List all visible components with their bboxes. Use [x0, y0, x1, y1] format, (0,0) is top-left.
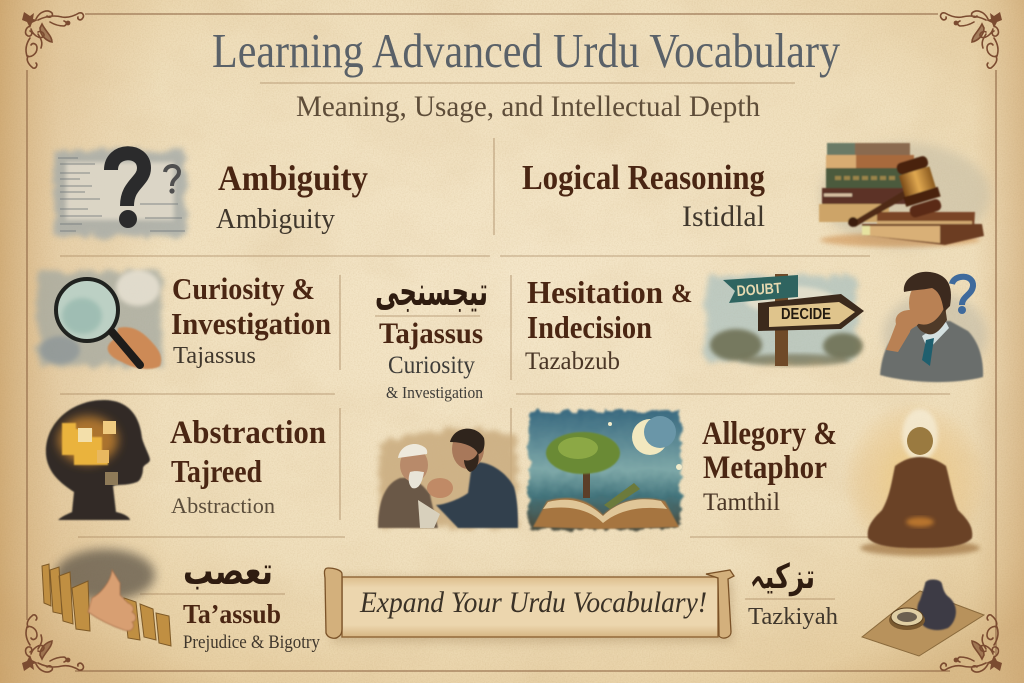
- meaning: Prejudice and Bigotry: Prejudice & Bigotry: [183, 632, 320, 653]
- urdu word: تعصب: [183, 549, 273, 593]
- meaning: and Investigation: & Investigation: [386, 383, 483, 402]
- heading: Curiosity &: Curiosity &: [172, 271, 315, 306]
- transliteration: Ambiguity: Ambiguity: [216, 203, 335, 235]
- corner ornament: top left: [22, 11, 83, 68]
- heading: Tajassus: Tajassus: [379, 317, 483, 350]
- icon: magnifying glass in hand: [38, 270, 162, 369]
- heading: Investigation: Investigation: [171, 306, 331, 341]
- icon: books and gavel: [819, 143, 990, 247]
- panel: abstraction: [46, 400, 326, 520]
- transliteration: Tazkiyah: Tazkiyah: [748, 604, 838, 630]
- panel: curiosity and investigation: [38, 270, 331, 369]
- panel: ambiguity: [54, 150, 368, 236]
- meaning: Curiosity: Curiosity: [388, 352, 475, 379]
- panel: allegory and metaphor: [702, 402, 987, 558]
- heading: Ta'assub: Ta’assub: [183, 599, 281, 629]
- panel: tajassus: [375, 269, 488, 402]
- icon: thinking man with question mark: [880, 272, 987, 382]
- heading: Ambiguity: Ambiguity: [218, 158, 368, 198]
- panel: ta'assub: [42, 549, 320, 653]
- illustration: elder and young man in discussion: [378, 429, 518, 528]
- icon: head silhouette with glowing fragments: [46, 400, 150, 520]
- icon: doubt and decide signpost: [706, 274, 864, 366]
- icon: doubt and decide signpost: DECIDE: [781, 306, 831, 323]
- title: Learning Advanced Urdu Vocabulary: [212, 23, 840, 78]
- subtitle: Meaning, Usage, and Intellectual Depth: [296, 90, 760, 123]
- icon: doubt and decide signpost: DOUBT: [736, 280, 782, 300]
- heading: Allegory &: Allegory &: [702, 416, 837, 452]
- panel: hesitation and indecision: [525, 272, 987, 382]
- urdu word: تیجسنجی: [375, 269, 488, 315]
- panel: logical reasoning: [522, 143, 990, 247]
- banner: expand your vocabulary: Expand Your Urdu Vocabulary!: [359, 586, 707, 619]
- corner ornament: bottom right: [941, 615, 1002, 672]
- icon: question marks over faded text: [54, 150, 186, 236]
- transliteration: Istidlal: Istidlal: [682, 200, 765, 233]
- icon: meditating figure with glow: [843, 402, 987, 558]
- heading: Logical Reasoning: Logical Reasoning: [522, 158, 765, 197]
- transliteration: Tamthil: Tamthil: [703, 489, 780, 516]
- meaning: Abstraction: Abstraction: [171, 493, 275, 518]
- transliteration: Tazabzub: Tazabzub: [525, 348, 620, 375]
- corner ornament: top right: [941, 11, 1002, 68]
- panel: tazkiyah: [748, 557, 984, 656]
- heading: Indecision: Indecision: [527, 309, 652, 345]
- illustration: tree and crescent moon on open book: [529, 411, 682, 529]
- banner: expand your vocabulary: [324, 568, 734, 642]
- ampersand: &: [671, 279, 693, 308]
- corner ornament: bottom left: [22, 615, 83, 672]
- icon: dominoes and hand: [42, 549, 171, 646]
- heading: Tajreed: Tajreed: [171, 453, 262, 489]
- icon: tea set on tray: [862, 580, 984, 656]
- urdu word: تزکیہ: [750, 557, 815, 597]
- heading: Hesitation: Hesitation: [527, 274, 663, 310]
- heading: Metaphor: Metaphor: [703, 450, 827, 486]
- transliteration: Tajassus: Tajassus: [173, 343, 256, 369]
- heading: Abstraction: Abstraction: [170, 415, 326, 451]
